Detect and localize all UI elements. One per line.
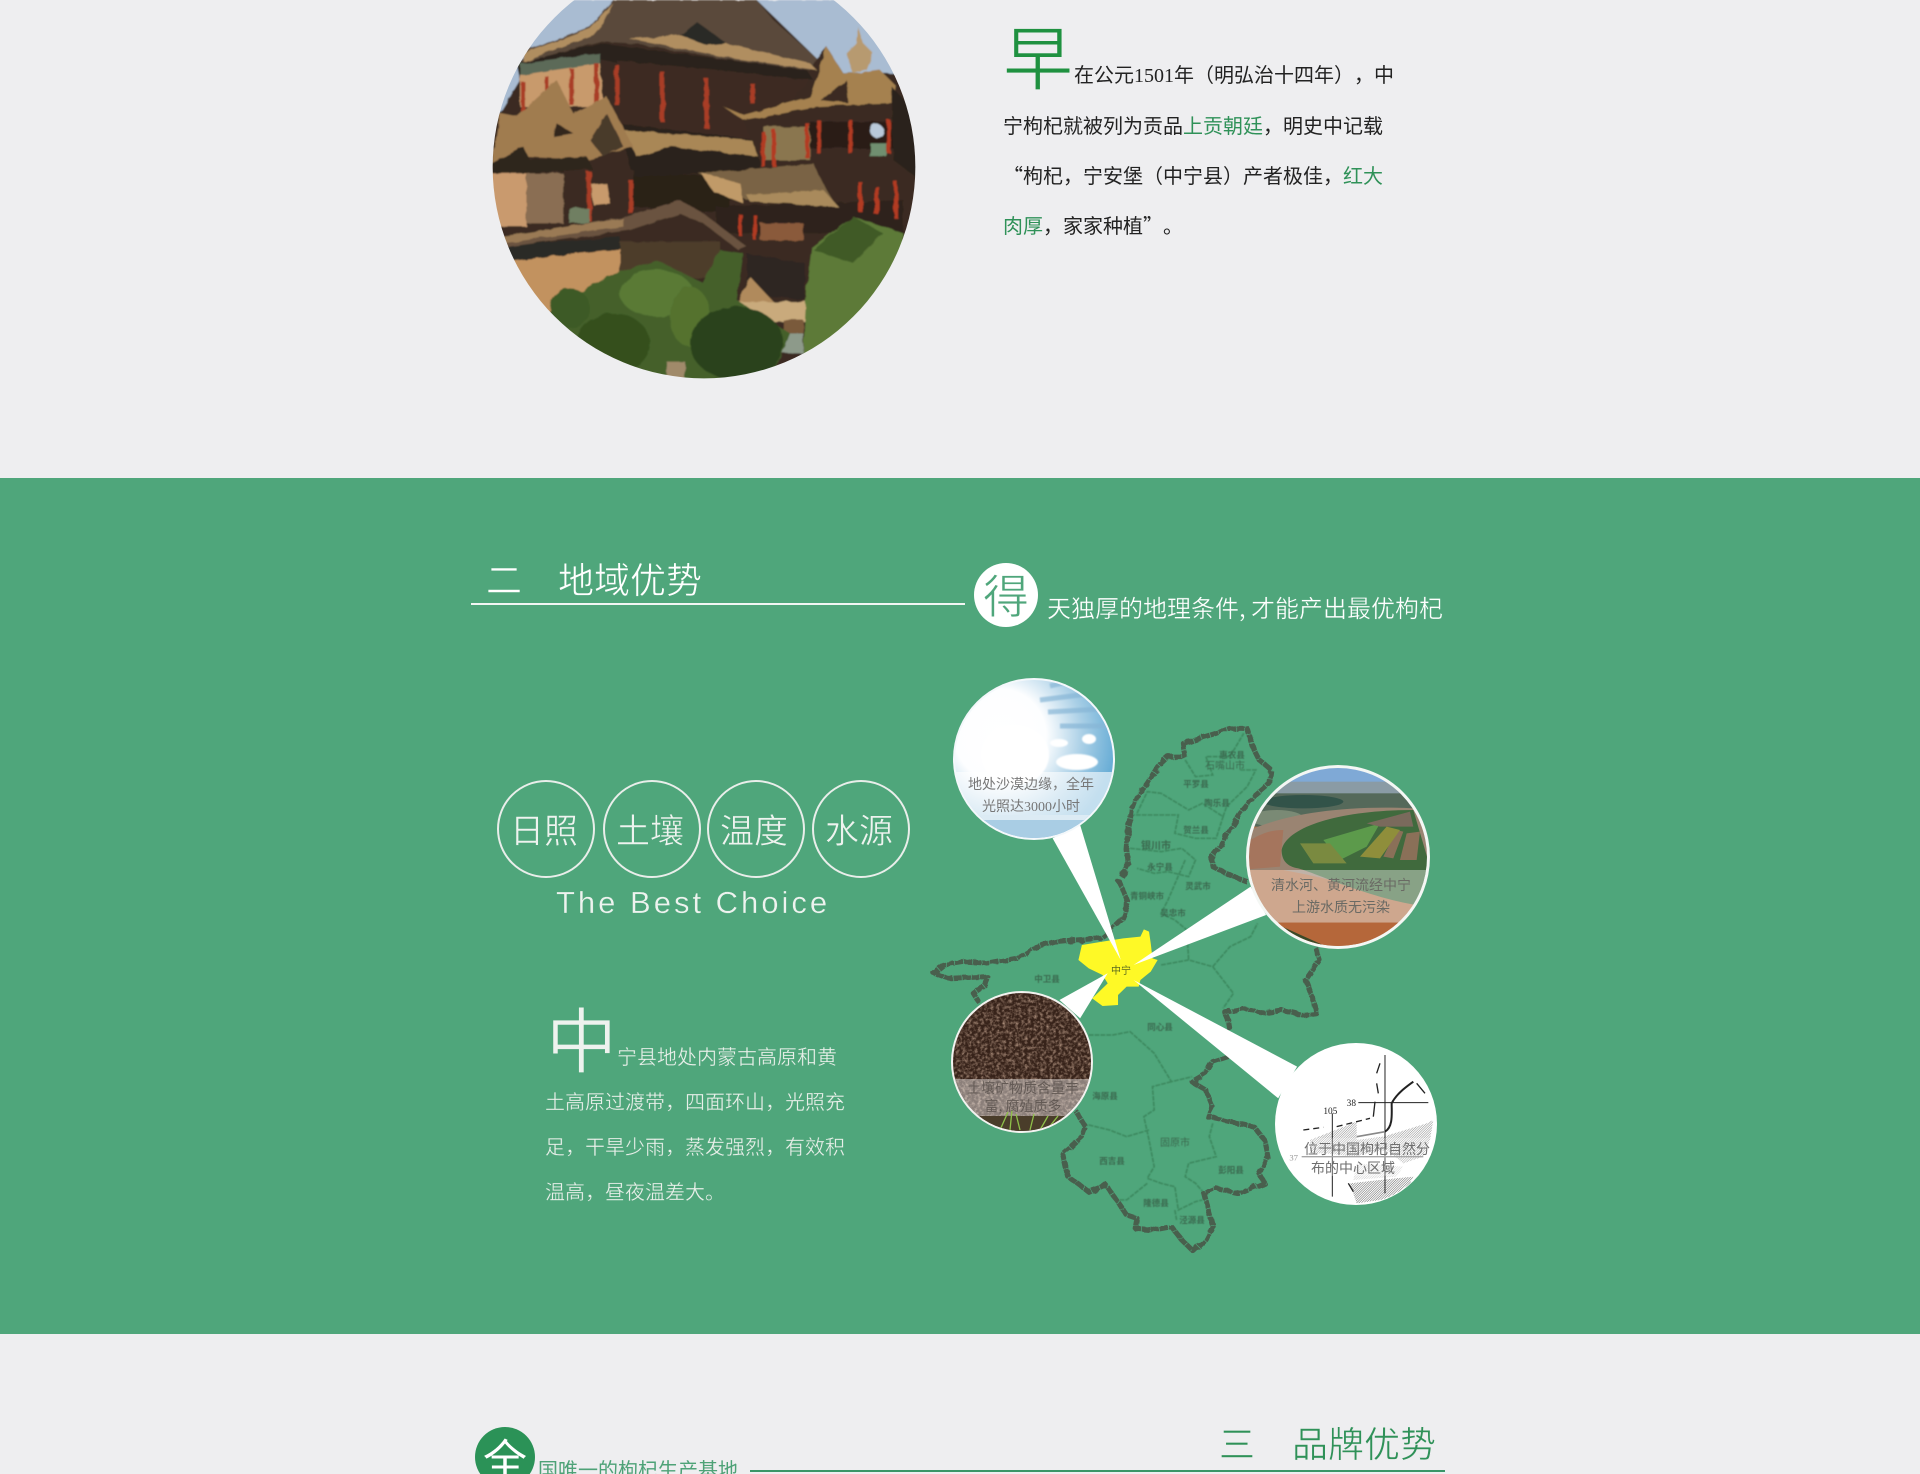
callout: river circle: 上游水质无污染 <box>1292 897 1390 917</box>
caption band <box>950 772 1120 820</box>
map: county labels: 彭阳县 <box>1218 1164 1244 1176</box>
heading: section three: 品牌优势 <box>1292 1416 1436 1468</box>
ring: soil: 土壤 <box>616 804 684 853</box>
text block: early tribute history <box>1003 4 1394 239</box>
heading: section three <box>750 1418 1445 1472</box>
map: county labels: 灵武市 <box>1185 880 1211 892</box>
map: county labels: 中卫县 <box>1034 973 1060 985</box>
callout: distribution map circle: 38 <box>1347 1099 1356 1109</box>
ring: water <box>812 780 910 878</box>
panel: history section image <box>492 0 916 378</box>
ring: sunshine: 日照 <box>510 804 578 853</box>
line 1: 在公元1501年（明弘治十四年），中 <box>1074 65 1394 87</box>
caption band <box>950 1079 1095 1116</box>
map: county labels: 平罗县 <box>1183 778 1209 790</box>
map of Ningxia with callout circles <box>930 678 1437 1254</box>
map: county labels: 吴忠市 <box>1160 907 1186 919</box>
ring: soil <box>603 780 701 878</box>
subheading: heaven-blessed conditions <box>974 561 1443 627</box>
map: county labels: 隆德县 <box>1143 1197 1169 1209</box>
heading: section two: 地域优势 <box>558 552 702 604</box>
map: Zhongning highlighted region: 中宁 <box>1111 962 1131 977</box>
callout: sunshine circle: 光照达3000小时 <box>982 799 1080 815</box>
map: county labels: 贺兰县 <box>1183 824 1209 836</box>
caption band <box>1250 870 1426 922</box>
map: county labels: 陶乐县 <box>1204 797 1230 809</box>
map: county labels: 石嘴山市 <box>1205 757 1245 772</box>
map: county labels: 同心县 <box>1147 1021 1173 1033</box>
line 4: 肉厚，家家种植”。 <box>1003 210 1183 239</box>
line 4: 温高，昼夜温差大。 <box>545 1176 725 1205</box>
big character 早: 早 <box>1003 4 1073 105</box>
callout: distribution map circle: 位于中国枸杞自然分 <box>1304 1139 1430 1159</box>
map: county labels: 西吉县 <box>1099 1155 1125 1167</box>
map: county labels: 青铜峡市 <box>1130 890 1164 902</box>
line 2: 宁枸杞就被列为贡品上贡朝廷，明史中记载 <box>1003 116 1383 138</box>
subheading text: 天独厚的地理条件, 才能产出最优枸杞 <box>1047 589 1443 624</box>
subheading: only national base <box>475 1427 738 1474</box>
callout: soil circle: 土壤矿物质含量丰 <box>967 1078 1079 1098</box>
callout: sunshine circle <box>953 678 1115 840</box>
heading: section two: 二 <box>486 552 522 604</box>
line 2: 土高原过渡带，四面环山，光照充 <box>545 1086 845 1115</box>
callout: river circle: 清水河、黄河流经中宁 <box>1271 875 1411 895</box>
four factor rings <box>497 780 910 878</box>
ring: temperature <box>707 780 805 878</box>
ring: sunshine <box>497 780 595 878</box>
callout: soil circle: 富, 腐殖质多 <box>984 1096 1062 1116</box>
map: county labels: 银川市 <box>1141 837 1171 852</box>
ring: temperature: 温度 <box>720 804 788 853</box>
map: Zhongning highlighted region <box>1078 929 1158 1006</box>
icon: character 得 in white circle: 得 <box>983 561 1029 627</box>
callout: distribution map circle: 布的中心区域 <box>1311 1158 1395 1178</box>
caption band <box>1290 1138 1430 1176</box>
big character 中: 中 <box>546 986 617 1088</box>
callout: river circle <box>1246 765 1430 949</box>
map: county labels <box>1034 749 1245 1226</box>
map: county labels: 海原县 <box>1092 1090 1118 1102</box>
text block: Zhongning geography <box>545 986 845 1205</box>
arrows: white callout rays <box>1053 825 1297 1098</box>
map: county labels: 永宁县 <box>1147 861 1173 873</box>
callout: soil circle <box>950 990 1095 1136</box>
callout: distribution map circle <box>1270 1043 1440 1205</box>
line 3: 足，干旱少雨，蒸发强烈，有效积 <box>545 1131 845 1160</box>
map: county labels: 泾源县 <box>1179 1214 1205 1226</box>
map: county labels: 惠农县 <box>1219 749 1245 761</box>
map: outer boundary and inner borders <box>934 728 1320 1252</box>
ring: water: 水源 <box>825 804 893 853</box>
tagline: The Best Choice: The Best Choice <box>556 885 830 920</box>
line 1: 宁县地处内蒙古高原和黄 <box>617 1041 837 1070</box>
callout: distribution map circle: 105 <box>1323 1107 1338 1117</box>
line 3: “枸杞，宁安堡（中宁县）产者极佳，红大 <box>1003 160 1383 189</box>
map: county labels: 固原市 <box>1160 1134 1190 1149</box>
heading: section three: 三 <box>1219 1416 1255 1468</box>
callout: sunshine circle: 地处沙漠边缘，全年 <box>968 774 1094 794</box>
panel: geographic advantage band <box>0 478 1920 1334</box>
heading: section two <box>471 553 965 605</box>
callout: distribution map circle: 37 <box>1289 1153 1299 1163</box>
